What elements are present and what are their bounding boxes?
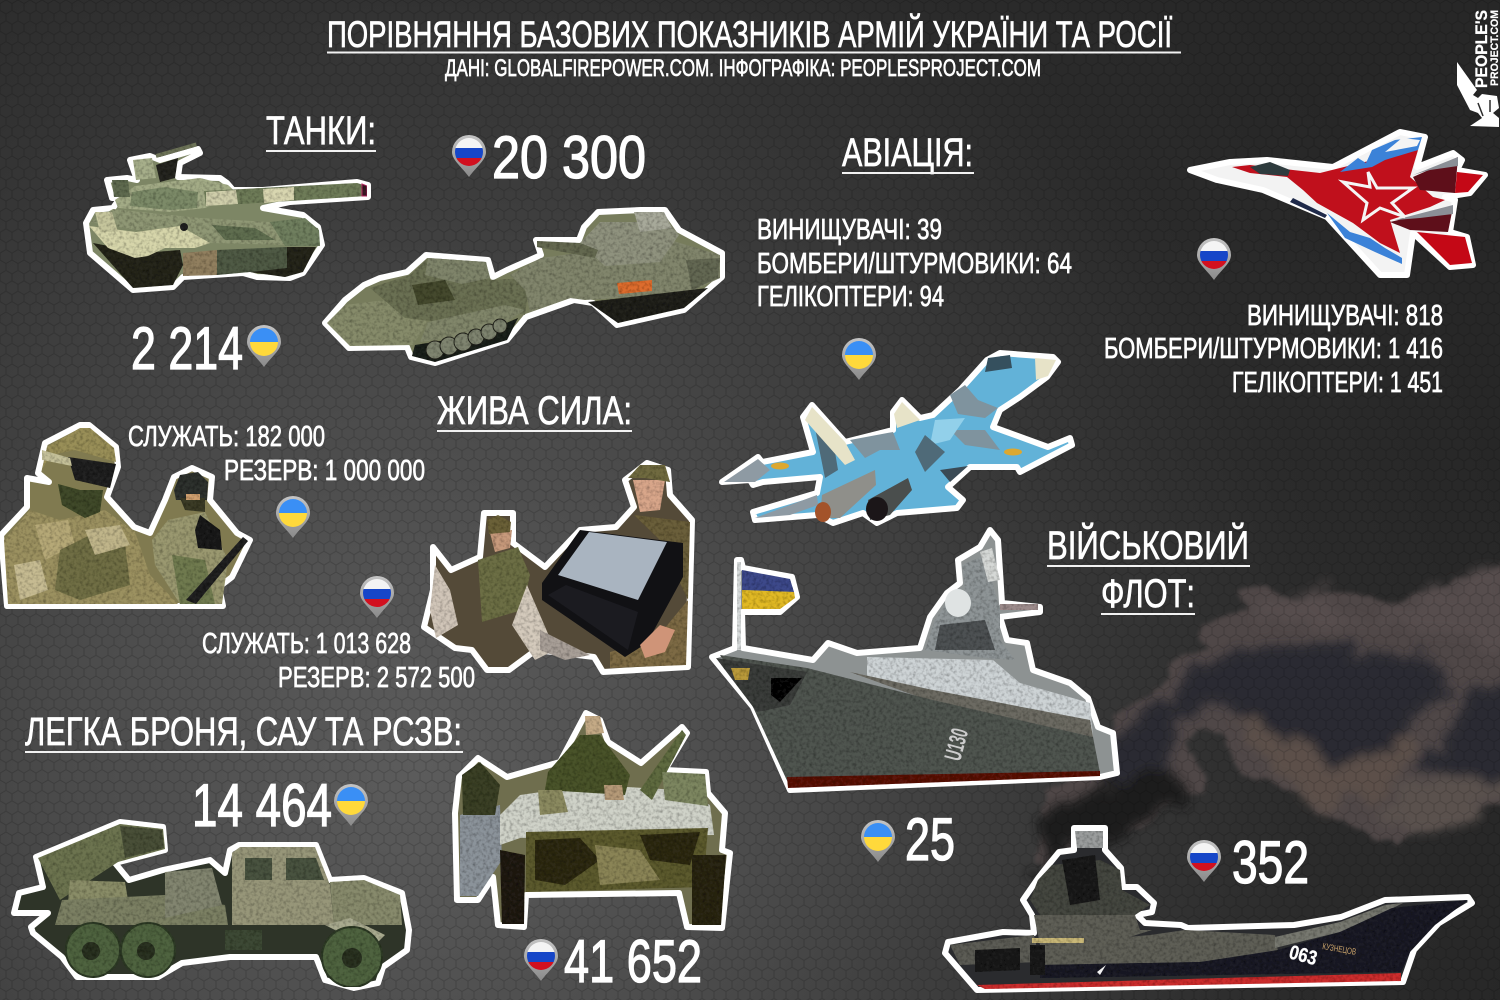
russian aviation stats: ВИНИЩУВАЧІ: 818: [1247, 300, 1443, 332]
ukrainian manpower stats: РЕЗЕРВ: 1 000 000: [224, 455, 425, 487]
ukrainian tanks number: 2 214: [131, 315, 243, 382]
ship: Ukrainian frigate Hetman Sahaidachny: U130: [940, 726, 974, 764]
russian manpower stats: СЛУЖАТЬ: 1 013 628: [202, 628, 411, 660]
jet: Russian MiG-29: [1190, 132, 1485, 275]
heading: aviation: АВІАЦІЯ:: [842, 131, 973, 175]
heading: navy: [1047, 522, 1250, 616]
subtitle: ДАНІ: GLOBALFIREPOWER.COM. ІНФОГРАФІКА: PEOPLESPROJECT.COM: [445, 55, 1041, 82]
pin: Russia, manpower: [360, 576, 394, 618]
tank: Ukrainian T-84: [86, 143, 368, 290]
russian navy number: 352: [1232, 829, 1309, 896]
heading: tanks: ТАНКИ:: [266, 109, 376, 153]
pin: Ukraine, navy: [861, 820, 895, 862]
russian manpower stats: [202, 628, 475, 694]
ship: Russian aircraft carrier Kuznetsov: [945, 828, 1472, 990]
soldiers: Russian looters with geese and TV: [424, 463, 692, 672]
ukrainian navy number: 25: [905, 806, 955, 873]
russian aviation stats: [1104, 300, 1443, 399]
vehicle: Grad rocket launcher truck: [14, 822, 409, 988]
tanks: Russian Armata and recovery vehicle: [325, 210, 722, 363]
heading: navy: ВІЙСЬКОВИЙ: [1047, 522, 1249, 568]
pin: Ukraine, tanks: [247, 325, 281, 367]
ukrainian armour number: 14 464: [192, 772, 332, 839]
heading: light armour: ЛЕГКА БРОНЯ, САУ ТА РСЗВ:: [25, 710, 462, 754]
logo: People's Project: [1457, 10, 1500, 127]
ship: Ukrainian frigate Hetman Sahaidachny: [712, 530, 1117, 790]
soldiers: Ukrainian troops: [1, 425, 250, 606]
pin: Russia, aviation: [1197, 238, 1231, 280]
vehicle: Russian BMD with troops: [455, 713, 730, 928]
pin: Russia, armour: [524, 939, 558, 981]
russian tanks number: 20 300: [492, 124, 646, 191]
ukrainian aviation stats: БОМБЕРИ/ШТУРМОВИКИ: 64: [757, 248, 1072, 280]
ukrainian manpower stats: [128, 421, 425, 487]
heading: manpower: ЖИВА СИЛА:: [437, 389, 632, 433]
ship: Russian aircraft carrier Kuznetsov: 063: [1287, 942, 1319, 970]
pin: Ukraine, aviation: [842, 338, 876, 380]
pin: Russia, navy: [1187, 840, 1221, 882]
heading: navy: ФЛОТ:: [1101, 572, 1195, 616]
russian manpower stats: РЕЗЕРВ: 2 572 500: [278, 662, 475, 694]
logo: People's Project: PEOPLE'S: [1472, 10, 1491, 88]
ukrainian aviation stats: ГЕЛІКОПТЕРИ: 94: [757, 281, 944, 313]
ship: Russian aircraft carrier Kuznetsov: КУЗНЕЦОВ: [1322, 941, 1357, 957]
pin: Ukraine, armour: [334, 784, 368, 826]
ukrainian manpower stats: СЛУЖАТЬ: 182 000: [128, 421, 325, 453]
ukrainian aviation stats: [757, 214, 1072, 313]
pin: Ukraine, manpower: [276, 496, 310, 538]
ukrainian aviation stats: ВИНИЩУВАЧІ: 39: [757, 214, 942, 246]
pin: Russia, tanks: [452, 135, 486, 177]
title: ПОРІВНЯННЯ БАЗОВИХ ПОКАЗНИКІВ АРМІЙ УКРАЇНИ ТА РОСІЇ: [327, 13, 1173, 55]
jet: Ukrainian Su-27: [722, 353, 1072, 523]
russian armour number: 41 652: [564, 928, 702, 995]
